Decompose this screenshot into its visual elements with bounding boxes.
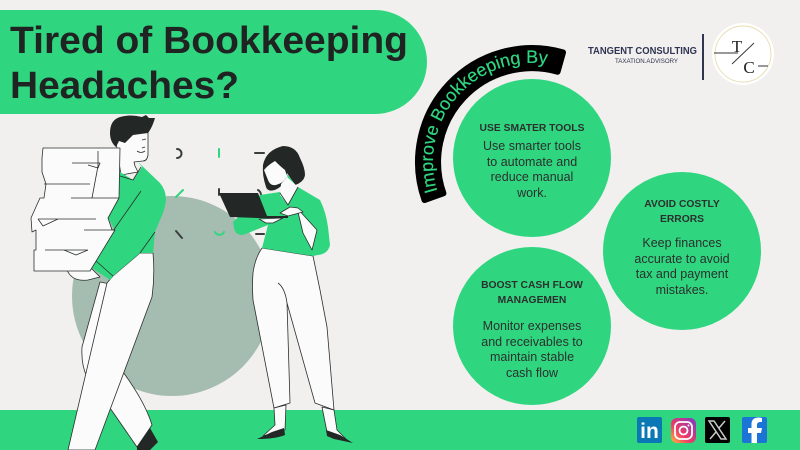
hair <box>263 146 305 191</box>
card: boost cash flow: maintain stable <box>490 350 574 364</box>
card: boost cash flow <box>453 247 611 405</box>
decorative burst marks <box>176 149 264 238</box>
title: Tired of Bookkeeping <box>10 20 408 62</box>
background circle <box>72 196 272 396</box>
logo badge <box>712 23 774 85</box>
ankles <box>263 405 286 436</box>
logo divider <box>702 34 704 80</box>
hands <box>280 207 303 216</box>
card: use smarter tools <box>453 79 611 237</box>
icon: facebook <box>742 417 767 443</box>
icon: x <box>705 417 730 443</box>
card: avoid costly errors: ERRORS <box>660 214 704 225</box>
title banner <box>0 10 427 114</box>
arc banner <box>414 45 566 203</box>
card: use smarter tools: to automate and <box>487 155 577 169</box>
card: boost cash flow: and receivables to <box>481 335 583 349</box>
company name: TAXATION.ADVISORY <box>615 58 678 65</box>
shoes <box>257 428 285 439</box>
illustration: woman with laptop <box>219 146 353 443</box>
hair <box>110 115 155 147</box>
arc label: Improve Bookkeeping By <box>423 50 548 194</box>
footer band <box>0 410 800 450</box>
shoe <box>137 428 158 450</box>
company name: TANGENT CONSULTING <box>588 46 697 57</box>
card: avoid costly errors: accurate to avoid <box>634 252 730 266</box>
card: boost cash flow: BOOST CASH FLOW <box>481 280 583 291</box>
card: avoid costly errors: mistakes. <box>656 283 708 297</box>
shirt opening <box>297 208 317 250</box>
icon: linkedin <box>637 417 662 443</box>
front leg <box>68 253 154 450</box>
icon: linkedin: in <box>640 420 659 443</box>
illustration: man carrying boxes <box>31 115 166 450</box>
card: avoid costly errors: AVOID COSTLY <box>644 199 720 210</box>
card: use smarter tools: reduce manual <box>491 170 573 184</box>
company name <box>588 46 697 65</box>
neck and face <box>116 132 148 175</box>
neck collar <box>280 177 298 205</box>
card: avoid costly errors <box>603 172 761 330</box>
title: Headaches? <box>10 65 239 107</box>
card: use smarter tools: Use smarter tools <box>483 139 581 153</box>
sweater <box>233 187 330 256</box>
back leg <box>82 282 152 447</box>
sweater <box>92 162 166 280</box>
card: avoid costly errors: Keep finances <box>642 236 722 250</box>
card: use smarter tools: USE SMATER TOOLS <box>480 123 585 134</box>
face <box>264 161 287 185</box>
hand under boxes <box>67 269 100 280</box>
card: boost cash flow: MANAGEMEN <box>498 295 566 306</box>
card: use smarter tools: work. <box>516 186 547 200</box>
icon: instagram <box>671 418 696 443</box>
card: avoid costly errors: tax and payment <box>636 267 729 281</box>
logo badge: C <box>743 58 755 77</box>
laptop <box>219 193 288 218</box>
stack of boxes <box>31 148 120 271</box>
card: boost cash flow: Monitor expenses <box>483 319 581 333</box>
pants <box>252 248 334 410</box>
card: boost cash flow: cash flow <box>506 366 559 380</box>
face details <box>137 139 146 152</box>
logo badge: T <box>732 37 743 56</box>
